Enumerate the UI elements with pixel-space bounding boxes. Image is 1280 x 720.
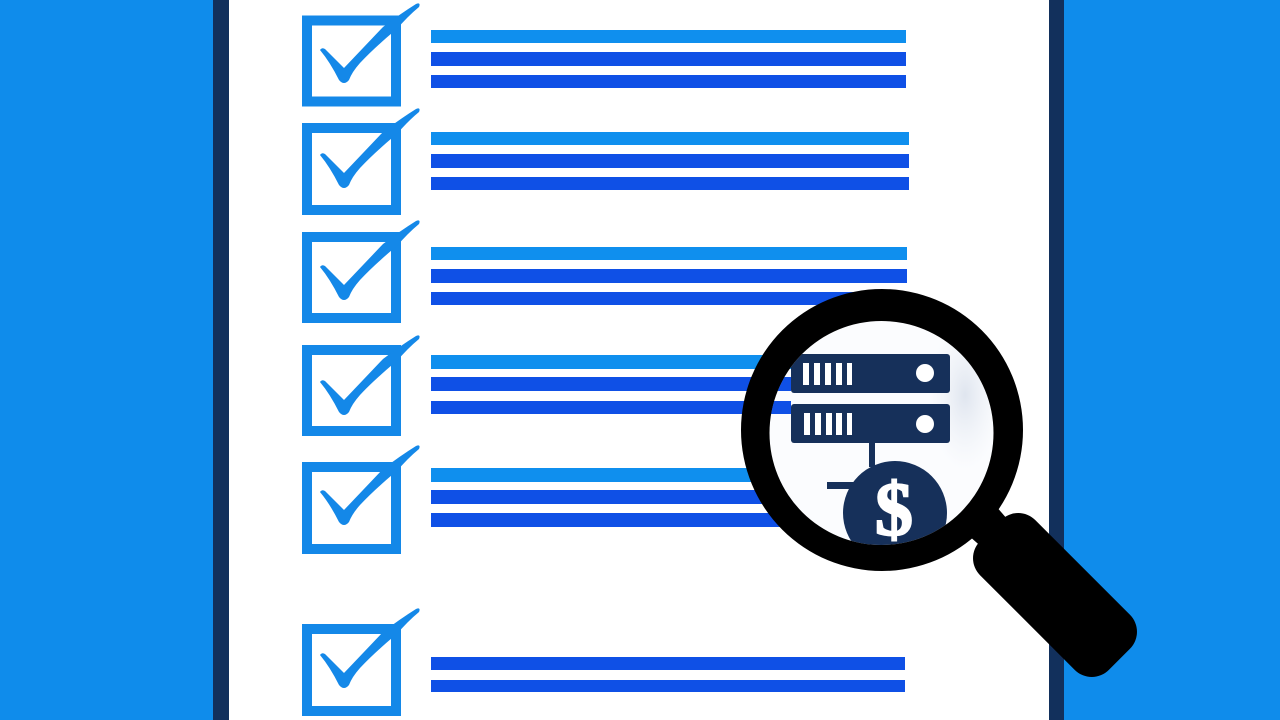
checklist row 5 <box>307 445 781 549</box>
paper sheet <box>213 0 1064 720</box>
checklist row 3 <box>307 220 907 318</box>
lens contents <box>771 346 992 545</box>
lens ring <box>741 289 1023 571</box>
magnifying glass <box>741 289 1147 687</box>
icon: dollar coin <box>843 461 947 545</box>
icon: dollar coin: $ <box>875 468 913 552</box>
checklist row 6 <box>307 608 905 711</box>
infographic: checklist with magnifier <box>213 0 1137 720</box>
handle <box>963 503 1147 687</box>
checklist row 1 <box>307 3 906 101</box>
checklist row 4 <box>307 335 791 431</box>
checklist row 2 <box>307 108 909 210</box>
icon: server stack <box>791 354 950 489</box>
